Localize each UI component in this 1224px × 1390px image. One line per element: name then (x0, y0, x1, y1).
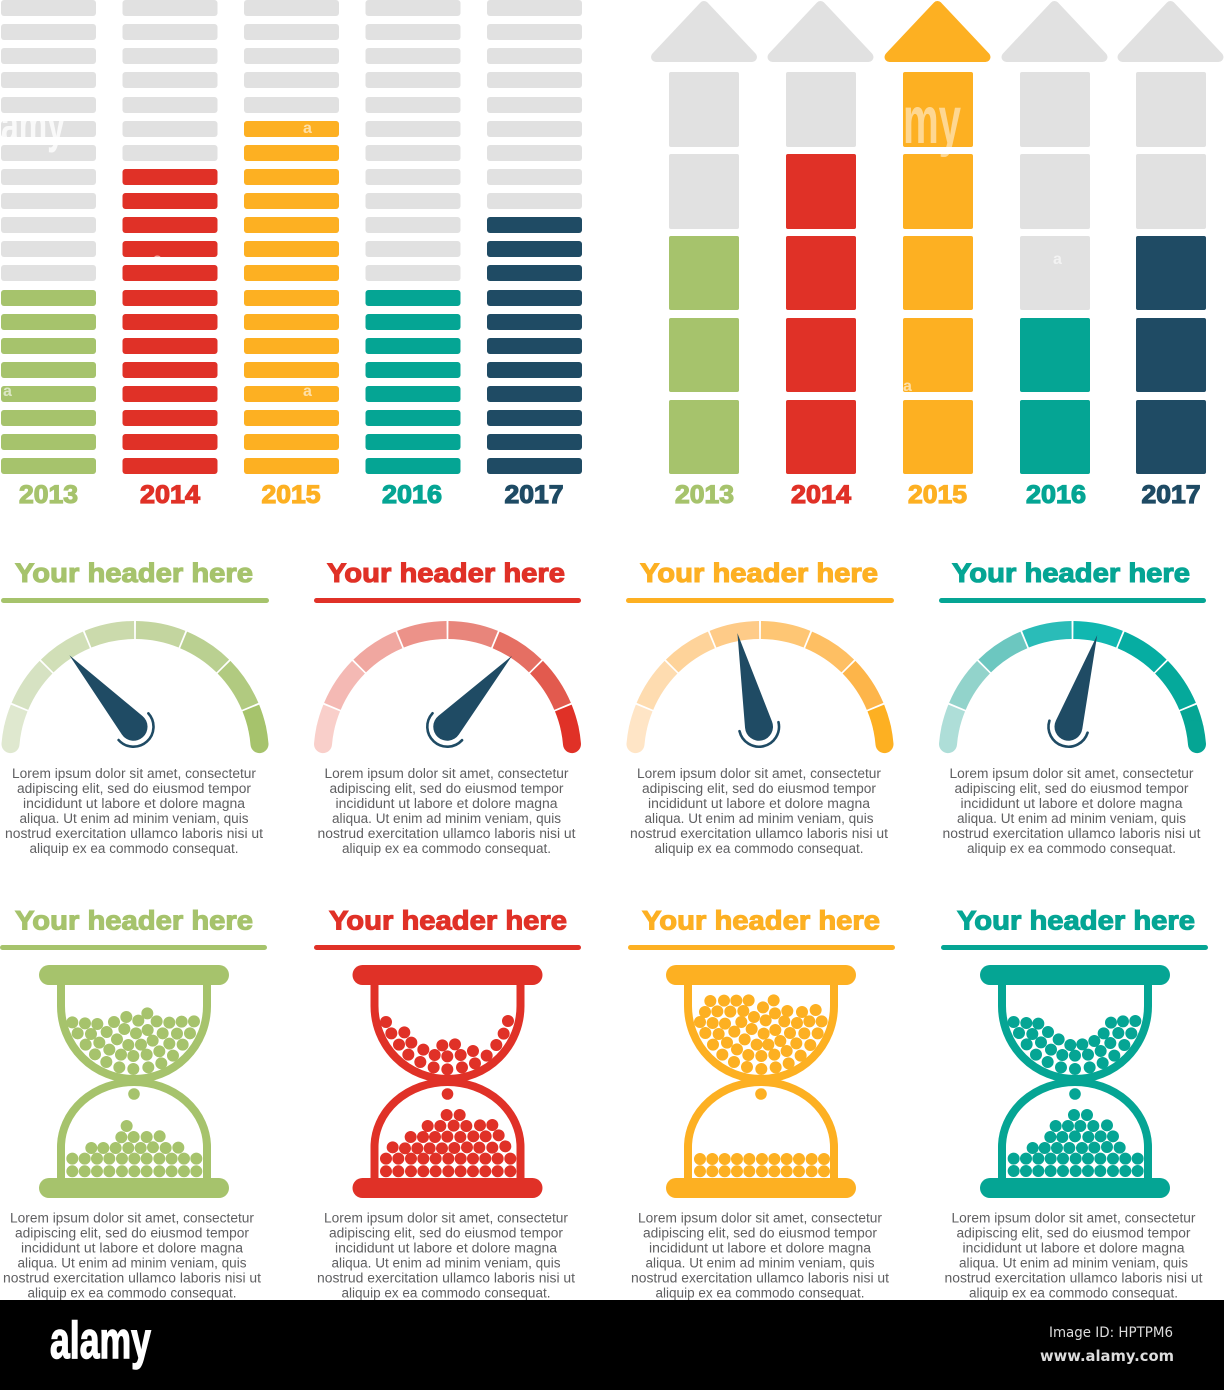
watermark: centre right: my (903, 83, 961, 158)
watermark: scattered fragments: a (3, 383, 12, 400)
text block: incididunt ut labore et dolore magna (649, 1240, 871, 1256)
year labels for meters: 2015 (262, 481, 321, 509)
needle (1043, 629, 1116, 752)
year labels for arrows (675, 481, 1200, 509)
meter column 2014 (122, 0, 218, 474)
text block: Lorem ipsum dolor sit amet, consectetur (952, 1210, 1196, 1226)
heading: Your header here (329, 906, 567, 936)
text block: Lorem ipsum dolor sit amet, consectetur (637, 766, 882, 781)
text block: nostrud exercitation ullamco laboris nisi ut (3, 1270, 261, 1286)
heading: Your header here (15, 906, 253, 936)
text block: incididunt ut labore et dolore magna (963, 1240, 1185, 1256)
gauge dial (10, 630, 260, 744)
text block: Lorem ipsum dolor sit amet, consectetur (12, 766, 257, 781)
footer logo: alamy (50, 1312, 151, 1370)
footer bar (0, 1300, 1224, 1390)
text block (5, 766, 263, 856)
heading: Your header here (957, 906, 1195, 936)
text block: adipiscing elit, sed do eiusmod tempor (329, 1226, 563, 1240)
text block: adipiscing elit, sed do eiusmod tempor (954, 781, 1189, 796)
year labels for arrows: 2015 (908, 481, 967, 509)
heading: Your header here (327, 558, 565, 588)
watermark: scattered fragments: a (153, 251, 162, 268)
needle (55, 642, 162, 755)
year labels for arrows: 2014 (791, 481, 851, 509)
text block: aliquip ex ea commodo consequat. (967, 841, 1176, 856)
text block: Lorem ipsum dolor sit amet, consectetur (638, 1210, 883, 1226)
text block (631, 1210, 889, 1300)
watermark: scattered fragments: a (903, 378, 912, 395)
arrow column 2016 (1006, 6, 1102, 474)
text block: aliquip ex ea commodo consequat. (969, 1286, 1178, 1300)
arrow chart: block arrows by year (656, 6, 1218, 509)
watermark: scattered fragments (3, 120, 1062, 400)
heading: Your header here (952, 558, 1190, 588)
panel: hourglass orange (628, 906, 895, 1300)
arrow column 2015 (890, 6, 986, 474)
text block: incididunt ut labore et dolore magna (336, 796, 558, 811)
text block: nostrud exercitation ullamco laboris nisi ut (942, 826, 1201, 841)
hourglass frame (39, 965, 229, 1198)
text block: aliqua. Ut enim ad minim veniam, quis (959, 1256, 1188, 1270)
sand balls (1014, 1021, 1138, 1171)
text block: Lorem ipsum dolor sit amet, consectetur (950, 766, 1194, 781)
arrow column 2017 (1122, 6, 1218, 474)
text block: incididunt ut labore et dolore magna (23, 796, 245, 811)
panel: gauge orange (626, 558, 894, 856)
text block: aliqua. Ut enim ad minim veniam, quis (957, 811, 1186, 826)
text block: aliquip ex ea commodo consequat. (654, 841, 864, 856)
text block: adipiscing elit, sed do eiusmod tempor (643, 1226, 877, 1240)
text block: aliquip ex ea commodo consequat. (656, 1286, 864, 1300)
text block: aliqua. Ut enim ad minim veniam, quis (332, 1256, 561, 1270)
text block: incididunt ut labore et dolore magna (21, 1240, 243, 1256)
needle (718, 629, 783, 751)
gauge dial (323, 630, 572, 744)
meter column 2016 (366, 0, 460, 474)
meter column 2017 (487, 0, 582, 474)
hourglass frame (980, 965, 1170, 1198)
text block (942, 766, 1201, 856)
sand balls (72, 1013, 196, 1171)
heading: Your header here (15, 558, 253, 588)
text block: incididunt ut labore et dolore magna (961, 796, 1183, 811)
arrow column 2013 (656, 6, 752, 474)
text block: adipiscing elit, sed do eiusmod tempor (15, 1226, 249, 1240)
image id: Image ID: HPTPM6 (1049, 1325, 1173, 1341)
year labels for arrows: 2016 (1026, 481, 1086, 509)
gauge dial (636, 630, 884, 744)
panel: hourglass red (314, 906, 581, 1300)
sand balls (386, 1021, 510, 1171)
text block: aliqua. Ut enim ad minim veniam, quis (332, 811, 561, 826)
hourglass frame (666, 965, 856, 1198)
hourglass frame (352, 965, 542, 1198)
text block: adipiscing elit, sed do eiusmod tempor (956, 1226, 1191, 1240)
text block: aliquip ex ea commodo consequat. (342, 1286, 550, 1300)
text block: adipiscing elit, sed do eiusmod tempor (642, 781, 876, 796)
text block (630, 766, 888, 856)
panel: gauge red (314, 558, 581, 856)
text block: aliquip ex ea commodo consequat. (342, 841, 551, 856)
year labels for meters: 2016 (382, 481, 442, 509)
heading: Your header here (642, 906, 880, 936)
text block: Lorem ipsum dolor sit amet, consectetur (10, 1210, 255, 1226)
watermark: scattered fragments: a (303, 120, 312, 137)
text block: aliqua. Ut enim ad minim veniam, quis (20, 811, 249, 826)
meter column 2013 (1, 0, 96, 474)
text block (318, 766, 576, 856)
text block: adipiscing elit, sed do eiusmod tempor (330, 781, 564, 796)
year labels for arrows: 2013 (675, 481, 734, 509)
text block: Lorem ipsum dolor sit amet, consectetur (324, 766, 569, 781)
arrow column 2014 (772, 6, 868, 474)
text block (3, 1210, 261, 1300)
year labels for meters: 2013 (19, 481, 78, 509)
year labels for meters: 2014 (140, 481, 200, 509)
website: www.alamy.com (1040, 1347, 1174, 1365)
year labels for arrows: 2017 (1142, 481, 1200, 509)
text block: nostrud exercitation ullamco laboris nisi ut (317, 1270, 575, 1286)
text block: aliquip ex ea commodo consequat. (30, 841, 238, 856)
text block: nostrud exercitation ullamco laboris nisi ut (5, 826, 263, 841)
text block (944, 1210, 1203, 1300)
text block: aliquip ex ea commodo consequat. (28, 1286, 236, 1300)
year labels for meters: 2017 (504, 481, 564, 509)
gauge dial (948, 630, 1197, 744)
watermark: scattered fragments: a (1053, 251, 1062, 268)
text block: adipiscing elit, sed do eiusmod tempor (17, 781, 251, 796)
heading: Your header here (640, 558, 878, 588)
panel: hourglass teal (941, 906, 1208, 1300)
text block: incididunt ut labore et dolore magna (335, 1240, 557, 1256)
bar chart: striped level meters by year (1, 0, 582, 509)
text block: nostrud exercitation ullamco laboris nisi ut (630, 826, 888, 841)
text block: aliqua. Ut enim ad minim veniam, quis (645, 811, 874, 826)
panel: gauge teal (939, 558, 1206, 856)
watermark: scattered fragments: a (303, 383, 312, 400)
text block: nostrud exercitation ullamco laboris nisi ut (944, 1270, 1203, 1286)
panel: hourglass green (0, 906, 267, 1300)
panel: gauge green (1, 558, 269, 856)
text block: aliqua. Ut enim ad minim veniam, quis (18, 1256, 247, 1270)
watermark: left: amy (1, 97, 65, 153)
text block (317, 1210, 575, 1300)
text block: incididunt ut labore et dolore magna (648, 796, 870, 811)
text block: aliqua. Ut enim ad minim veniam, quis (646, 1256, 875, 1270)
text block: nostrud exercitation ullamco laboris nisi ut (631, 1270, 889, 1286)
text block: Lorem ipsum dolor sit amet, consectetur (324, 1210, 569, 1226)
meter column 2015 (244, 0, 339, 474)
text block: nostrud exercitation ullamco laboris nisi ut (318, 826, 576, 841)
sand balls (700, 1000, 824, 1171)
year labels for meters (19, 481, 564, 509)
needle (419, 642, 527, 755)
